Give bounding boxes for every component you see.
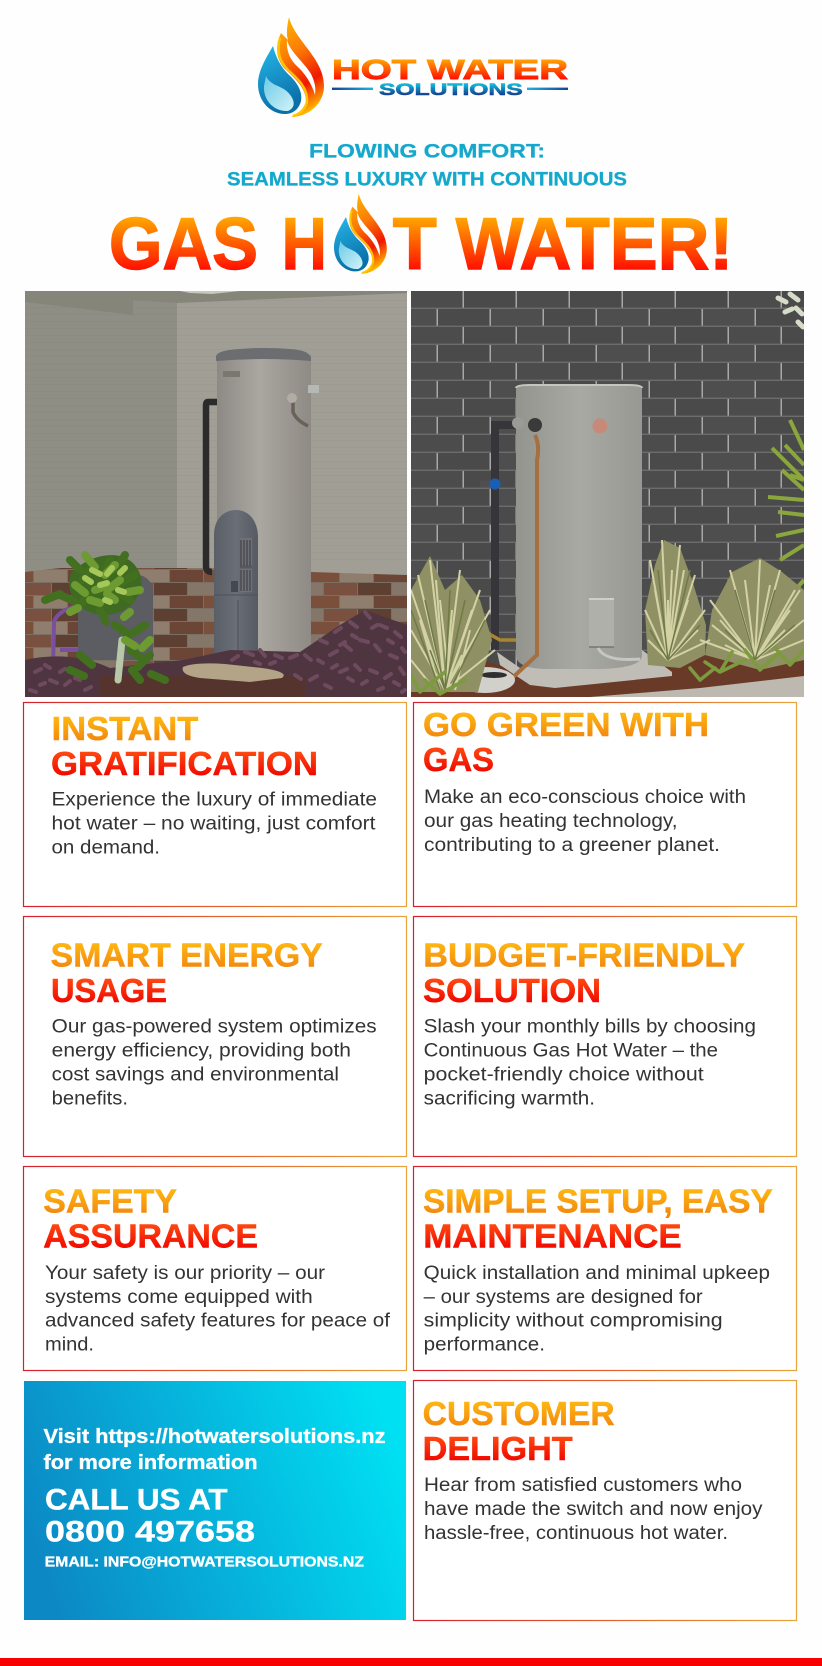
heading: USAGE [51, 972, 167, 1009]
body text: Your safety is our priority – our [45, 1263, 326, 1284]
title: GAS [109, 204, 258, 285]
phone number: CALL US AT [45, 1483, 228, 1516]
subtitle: SEAMLESS LUXURY WITH CONTINUOUS [227, 170, 627, 191]
panel: instant gratification [24, 702, 406, 906]
title: H [282, 204, 327, 285]
body text [424, 1017, 756, 1110]
black pipe [206, 402, 217, 572]
panel: customer delight [414, 1380, 796, 1620]
website text: for more information [44, 1451, 258, 1474]
tap and pipe [293, 400, 308, 426]
body text: pocket-friendly choice without [424, 1065, 704, 1086]
panel: contact call to action [24, 1381, 406, 1620]
body text: performance. [424, 1335, 545, 1356]
rock [183, 663, 284, 682]
paving [590, 676, 804, 697]
body text: systems come equipped with [45, 1287, 313, 1308]
body text: Quick installation and minimal upkeep [424, 1263, 770, 1284]
logo wordmark: SOLUTIONS [379, 81, 523, 99]
body text: sacrificing warmth. [424, 1089, 595, 1110]
heading [423, 1183, 773, 1255]
icon: flame drop as letter O [334, 194, 387, 274]
heading: MAINTENANCE [423, 1218, 682, 1255]
panel: safety assurance [24, 1166, 406, 1370]
body text: benefits. [52, 1089, 128, 1110]
logo wordmark [332, 54, 568, 99]
heading: INSTANT [52, 710, 198, 747]
body text: Continuous Gas Hot Water – the [424, 1041, 718, 1062]
logo [258, 17, 568, 117]
rheem badge [592, 418, 608, 434]
grey pipes [495, 425, 518, 650]
body text: Hear from satisfied customers who [424, 1475, 742, 1496]
bracket [308, 385, 319, 393]
heading: GO GREEN WITH [423, 706, 709, 743]
subtitle [227, 142, 627, 191]
body text: – our systems are designed for [424, 1287, 703, 1308]
body text [424, 1263, 770, 1356]
heading: ASSURANCE [43, 1218, 258, 1255]
heading: SAFETY [43, 1183, 177, 1220]
access box [589, 598, 614, 647]
body text: Make an eco-conscious choice with [424, 787, 746, 808]
blue valve [490, 478, 500, 490]
phone number: 0800 497658 [45, 1516, 255, 1549]
body text: Slash your monthly bills by choosing [424, 1017, 756, 1038]
heater tank [516, 385, 642, 669]
panel: simple setup, easy maintenance [414, 1166, 796, 1370]
heading [423, 937, 745, 1009]
mulch and foliage [25, 610, 407, 697]
title [109, 194, 733, 285]
logo wordmark: HOT WATER [332, 54, 568, 85]
heading [43, 1183, 258, 1255]
heading [423, 706, 709, 778]
title: WATER! [456, 204, 733, 285]
flue vent [214, 510, 258, 659]
heading: SMART ENERGY [51, 937, 323, 974]
grass clumps [411, 540, 804, 694]
body text [52, 790, 377, 859]
heading: SIMPLE SETUP, EASY [423, 1183, 773, 1220]
phone number [45, 1483, 255, 1549]
conduit [598, 648, 640, 660]
brass fittings [490, 632, 516, 642]
body text: Experience the luxury of immediate [52, 790, 377, 811]
body text: simplicity without compromising [424, 1311, 723, 1332]
green plant [45, 555, 165, 680]
heater cap [216, 348, 311, 361]
concrete base [497, 650, 672, 688]
heater body [217, 355, 311, 657]
heading: SOLUTION [423, 972, 601, 1009]
body text: hot water – no waiting, just comfort [52, 814, 376, 835]
heading: BUDGET-FRIENDLY [423, 937, 745, 974]
grey drain pipe [307, 425, 311, 662]
email: EMAIL: INFO@HOTWATERSOLUTIONS.NZ [45, 1554, 364, 1571]
valve fitting [512, 417, 542, 432]
dark tank behind plant [78, 574, 153, 660]
heading: GRATIFICATION [51, 745, 318, 782]
vent grille [214, 538, 258, 659]
heading [51, 710, 318, 782]
heading [51, 937, 323, 1009]
foliage top right [778, 294, 803, 327]
body text [45, 1263, 391, 1356]
body text: have made the switch and now enjoy [424, 1499, 763, 1520]
panel: budget-friendly solution [414, 916, 796, 1156]
body text: our gas heating technology, [424, 811, 678, 832]
copper pipe [510, 435, 538, 680]
website text: Visit https://hotwatersolutions.nz [44, 1425, 386, 1448]
body text: contributing to a greener planet. [424, 835, 720, 856]
body text: mind. [45, 1335, 94, 1356]
purple pipe [51, 605, 78, 656]
body text: Our gas-powered system optimizes [52, 1017, 377, 1038]
photo: gas water heater on dark brick wall [411, 291, 804, 697]
footer bar [0, 1658, 822, 1666]
panel: go green with gas [414, 702, 796, 906]
drain pad [474, 667, 515, 693]
tank rim [516, 385, 642, 388]
icon: flame and water drop [258, 17, 324, 117]
label [223, 371, 240, 377]
body text: hassle-free, continuous hot water. [424, 1523, 728, 1544]
website text [44, 1425, 386, 1474]
spiky green plant right [768, 419, 804, 587]
subtitle: FLOWING COMFORT: [309, 142, 545, 163]
heading [423, 1395, 615, 1467]
body text [424, 1475, 763, 1544]
panel: smart energy usage [24, 916, 406, 1156]
body text: on demand. [52, 838, 160, 859]
photo: gas water heater on beige wall [25, 291, 407, 698]
body text: cost savings and environmental [52, 1065, 339, 1086]
heading: DELIGHT [423, 1430, 573, 1467]
mulch [411, 650, 804, 697]
body text [52, 1017, 377, 1110]
body text: energy efficiency, providing both [52, 1041, 351, 1062]
body text [424, 787, 746, 856]
heading: GAS [423, 741, 494, 778]
heading: CUSTOMER [423, 1395, 615, 1432]
body text: advanced safety features for peace of [45, 1311, 391, 1332]
title: T [393, 204, 437, 285]
